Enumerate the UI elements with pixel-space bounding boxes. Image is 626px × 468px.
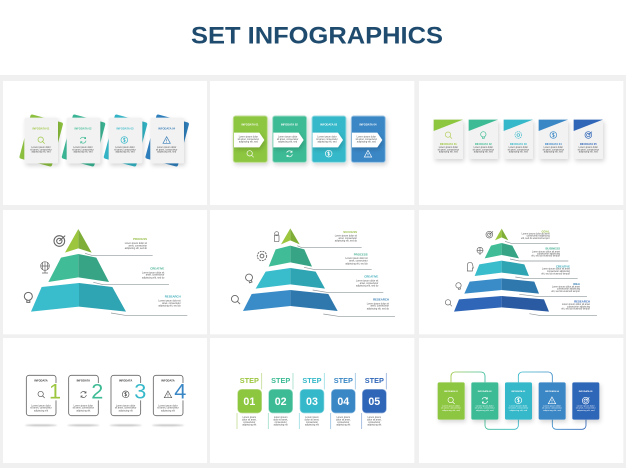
step 4: adipiscing elit <box>336 423 351 426</box>
card 5 <box>572 382 599 420</box>
card 1: adipiscing elit, sed <box>239 141 259 144</box>
label: creative: CREATIVE <box>556 264 570 268</box>
label: success: Lorem ipsum dolor sit <box>335 234 357 237</box>
leader lines <box>85 253 187 315</box>
label: idea: elit, sed do eiusmod tempor <box>551 290 580 293</box>
card 1: adipiscing elit, sed <box>31 151 51 154</box>
card 3: INFODATA 03 <box>511 390 526 393</box>
card 3: sit amet, consectetur <box>115 407 137 410</box>
label: goal: Lorem ipsum dolor sit amet <box>522 233 550 236</box>
label: business: BUSINESS <box>546 247 560 251</box>
pyramid <box>31 229 126 312</box>
step 4: consectetur <box>337 421 350 424</box>
card 1: sit amet, consectetur <box>30 407 52 410</box>
step 5 <box>362 373 386 429</box>
card 2: adipiscing elit, sed <box>476 409 494 412</box>
card 1: Lorem ipsum dolor <box>31 404 51 407</box>
step 4: 04 <box>337 396 349 408</box>
card 1: Lorem ipsum dolor <box>239 135 258 138</box>
label: business: consectetur adipiscing <box>537 253 561 256</box>
card 2: INFODATA 02 <box>281 122 298 126</box>
step 5: dolor sit amet, <box>367 418 382 421</box>
card 3: adipiscing elit <box>119 409 133 412</box>
label: process: amet, consectetur <box>128 244 147 247</box>
card 3: adipiscing elit, sed <box>317 141 337 144</box>
card 2 <box>469 120 498 159</box>
card 2 <box>61 114 106 167</box>
card 2: 2 <box>91 378 103 403</box>
card 4: sit amet, consectetur <box>157 407 179 410</box>
card 4 <box>539 382 566 420</box>
label: goal <box>521 229 550 240</box>
card 2: INFODATA 02 <box>75 126 92 130</box>
card 3: INFODATA 03 <box>320 122 338 126</box>
card 4: adipiscing elit, sed <box>543 409 562 412</box>
card 1 <box>233 116 267 162</box>
icon: bulb <box>24 292 32 302</box>
panel: connected cards <box>419 338 623 463</box>
card 4: 4 <box>174 378 186 403</box>
card 1 <box>438 382 465 420</box>
card 1: sit amet, consectetur <box>438 148 459 151</box>
card 3: sit amet, consectetur <box>508 407 529 410</box>
card 4: Lorem ipsum dolor <box>158 404 178 407</box>
card 4: Lorem ipsum dolor <box>544 146 563 149</box>
step 5: STEP <box>365 376 384 385</box>
step 3: 03 <box>306 396 318 408</box>
label: research: consectetur adipiscing <box>567 305 591 308</box>
card 1: adipiscing elit, sed <box>442 409 461 412</box>
step 5: consectetur <box>368 421 381 424</box>
card 4: sit amet, consectetur <box>542 407 562 410</box>
card 3: Lorem ipsum dolor <box>509 405 528 408</box>
card 5: Lorem ipsum dolor <box>579 146 598 149</box>
icon: globe <box>477 247 483 255</box>
card 2: sit amet, consectetur <box>277 138 299 141</box>
label: research: Lorem ipsum dolor sit <box>158 300 181 303</box>
card 2: Lorem ipsum dolor <box>73 146 93 149</box>
card 3: Lorem ipsum dolor <box>115 146 135 149</box>
card 1 <box>25 375 61 426</box>
card 4: adipiscing elit, sed <box>157 151 177 154</box>
card 4: INFODATA 04 <box>545 390 560 393</box>
card 2: adipiscing elit <box>76 409 91 412</box>
label: research: Lorem ipsum dolor sit amet <box>562 303 590 306</box>
step 2: adipiscing elit <box>274 423 288 426</box>
card 3: Lorem ipsum dolor <box>317 135 337 138</box>
label: research: Lorem ipsum dolor sit <box>367 302 389 305</box>
card 3: 3 <box>134 378 146 403</box>
label: business: Lorem ipsum dolor sit amet <box>532 250 560 253</box>
card 4 <box>152 375 186 426</box>
card 3 <box>505 382 532 420</box>
label: process: adipiscing elit, sed do <box>125 247 148 250</box>
card 1: INFODATA 01 <box>444 390 459 393</box>
label: process: PROCESS <box>354 252 368 256</box>
card 2: Lorem ipsum dolor <box>474 146 493 149</box>
step 4 <box>331 373 355 429</box>
label: process <box>345 252 368 265</box>
card 2: adipiscing elit, sed <box>474 151 494 154</box>
step 4: Lorem ipsum <box>337 416 350 419</box>
icon: head <box>467 262 473 271</box>
card 5: INFODATA 05 <box>580 142 597 146</box>
label: process: Lorem ipsum dolor sit <box>345 257 368 260</box>
card 5: sit amet, consectetur <box>578 148 599 151</box>
label: process: amet, consectetur <box>349 260 368 263</box>
card 2: INFODATA <box>77 378 90 382</box>
card 2 <box>67 375 103 426</box>
label: process <box>125 237 148 250</box>
label: creative <box>142 266 165 279</box>
card 4 <box>539 120 568 159</box>
card 4: INFODATA 04 <box>158 126 176 130</box>
card 3: sit amet, consectetur <box>114 148 136 151</box>
label: business: elit, sed do eiusmod tempor <box>531 255 560 258</box>
card 1: INFODATA 01 <box>242 122 259 126</box>
panel: outlined number cards <box>3 338 207 463</box>
label: idea: consectetur adipiscing <box>557 288 581 291</box>
card 3: sit amet, consectetur <box>508 148 529 151</box>
step 3: STEP <box>302 376 322 385</box>
label: success <box>335 230 358 243</box>
card 2: INFODATA 02 <box>478 390 492 393</box>
label: research <box>367 297 390 310</box>
step 1: dolor sit amet, <box>242 418 257 421</box>
leader lines <box>297 246 395 316</box>
icon: target <box>486 231 493 238</box>
card 4: INFODATA <box>161 378 175 382</box>
label: idea: IDEA <box>573 282 580 286</box>
card 1: sit amet, consectetur <box>441 407 461 410</box>
label: creative <box>356 275 379 288</box>
label: research: RESEARCH <box>373 297 389 301</box>
label: success: amet, consectetur <box>338 237 357 240</box>
card 2: sit amet, consectetur <box>73 407 94 410</box>
card 1: Lorem ipsum dolor <box>439 146 458 149</box>
panel: three level pyramid <box>3 210 207 334</box>
icon: target <box>54 236 65 246</box>
card 5: INFODATA 05 <box>579 390 593 393</box>
card 2: INFODATA 02 <box>475 142 492 146</box>
label: process: Lorem ipsum dolor sit <box>125 242 147 245</box>
card 4: Lorem ipsum dolor <box>157 146 177 149</box>
card 3 <box>110 375 146 426</box>
card 3: adipiscing elit, sed <box>510 409 528 412</box>
label: creative: adipiscing elit, sed do <box>142 276 165 279</box>
label: creative: elit, sed do eiusmod tempor <box>541 272 570 275</box>
panel: four level pyramid <box>210 210 414 334</box>
card 5: adipiscing elit, sed <box>577 409 595 412</box>
step 3 <box>299 373 324 429</box>
step 1: STEP <box>240 376 259 385</box>
label: research: RESEARCH <box>574 299 590 303</box>
card 1: INFODATA 01 <box>440 142 457 146</box>
step 1: consectetur <box>243 421 256 424</box>
card 1: sit amet, consectetur <box>238 138 259 141</box>
label: creative: Lorem ipsum dolor sit <box>142 271 165 274</box>
label: business <box>531 247 561 258</box>
icon: bulb <box>245 273 254 284</box>
step 2: Lorem ipsum <box>274 416 287 419</box>
card 5: sit amet, consectetur <box>576 407 596 410</box>
label: research: amet, consectetur <box>162 302 181 305</box>
label: creative: amet, consectetur <box>146 274 165 277</box>
label: creative: amet, consectetur <box>360 282 379 285</box>
label: success: adipiscing elit, sed do <box>335 240 358 243</box>
leader lines <box>505 241 597 316</box>
card 1 <box>19 114 63 167</box>
card 2: sit amet, consectetur <box>475 407 495 410</box>
step 3: adipiscing elit <box>305 423 319 426</box>
panel: rotated cards <box>3 81 207 205</box>
panel: arrow band cards <box>210 81 414 205</box>
label: creative: Lorem ipsum dolor sit <box>356 280 379 283</box>
card 1 <box>434 120 463 159</box>
card 4: Lorem ipsum dolor <box>357 135 376 138</box>
step 4: STEP <box>334 376 353 385</box>
step 1: 01 <box>243 396 255 408</box>
card 2: sit amet, consectetur <box>473 148 494 151</box>
card 5: Lorem ipsum dolor <box>577 405 595 408</box>
icon: gear <box>257 251 267 261</box>
card 1: adipiscing elit, sed <box>439 151 459 154</box>
card 2: adipiscing elit, sed <box>73 151 93 154</box>
card 4: adipiscing elit, sed <box>357 141 377 144</box>
card 5 <box>574 120 603 159</box>
card 3: INFODATA 03 <box>510 142 527 146</box>
card 1: INFODATA <box>34 378 48 382</box>
step 2 <box>268 373 293 429</box>
card 4: sit amet, consectetur <box>356 138 377 141</box>
card 3: adipiscing elit, sed <box>115 151 135 154</box>
card 2: Lorem ipsum dolor <box>74 404 93 407</box>
card 3 <box>312 116 346 162</box>
card 2 <box>471 382 498 420</box>
card 3: adipiscing elit, sed <box>509 151 529 154</box>
label: success: SUCCESS <box>343 230 357 234</box>
panel: corner triangle cards <box>419 81 623 205</box>
step 1 <box>237 373 262 429</box>
card 3: INFODATA <box>119 378 132 382</box>
card 2: Lorem ipsum dolor <box>278 135 298 138</box>
label: research: adipiscing elit, sed do <box>367 307 390 310</box>
card 4: adipiscing elit <box>161 409 175 412</box>
card 3 <box>103 114 148 167</box>
label: creative: CREATIVE <box>150 266 164 270</box>
card 4: INFODATA 04 <box>545 142 562 146</box>
step 3: consectetur <box>306 421 318 424</box>
step 2: STEP <box>271 376 290 385</box>
step 3: dolor sit amet, <box>305 418 320 421</box>
label: research: elit, sed do eiusmod tempor <box>561 308 590 311</box>
card 1: 1 <box>49 378 61 403</box>
icon: magnifier <box>231 295 240 304</box>
card 4: Lorem ipsum dolor <box>543 405 561 408</box>
step 1: adipiscing elit <box>242 423 257 426</box>
panel: five level pyramid <box>419 210 623 334</box>
label: creative: CREATIVE <box>364 275 378 279</box>
label: process: adipiscing elit, sed do <box>345 262 368 265</box>
card 4 <box>351 116 385 162</box>
panel: numbered steps <box>210 338 414 463</box>
step 1: Lorem ipsum <box>243 416 256 419</box>
label: goal: elit, sed do eiusmod tempor <box>521 237 550 240</box>
card 4: INFODATA 04 <box>360 122 377 126</box>
card 1: adipiscing elit <box>34 409 48 412</box>
connectors <box>451 372 586 429</box>
step 3: Lorem ipsum <box>305 416 319 419</box>
title: SET INFOGRAPHICS <box>191 22 443 49</box>
step 2: 02 <box>275 396 287 408</box>
icon: globe <box>41 262 49 273</box>
card 4 <box>145 114 189 167</box>
card 4: adipiscing elit, sed <box>544 151 564 154</box>
card 4: sit amet, consectetur <box>156 148 178 151</box>
step 4: dolor sit amet, <box>336 418 351 421</box>
card 1: Lorem ipsum dolor <box>442 405 460 408</box>
step 2: consectetur <box>275 421 287 424</box>
card 3: Lorem ipsum dolor <box>509 146 528 149</box>
card 3: INFODATA 03 <box>117 126 134 130</box>
step 2: dolor sit amet, <box>273 418 288 421</box>
card 1: INFODATA 01 <box>33 126 50 130</box>
icon: medal <box>274 232 279 242</box>
label: goal: consectetur adipiscing <box>527 235 550 238</box>
label: research <box>158 295 181 308</box>
step 5: Lorem ipsum <box>368 416 381 419</box>
card 2: sit amet, consectetur <box>72 148 94 151</box>
pyramid <box>454 229 549 312</box>
step 5: 05 <box>368 396 380 408</box>
card 5: adipiscing elit, sed <box>579 151 599 154</box>
label: research: RESEARCH <box>165 295 181 299</box>
card 3 <box>504 120 533 159</box>
pyramid <box>243 228 338 311</box>
label: research <box>561 299 591 311</box>
step 5: adipiscing elit <box>367 423 382 426</box>
card 3: Lorem ipsum dolor <box>116 404 136 407</box>
card 4: sit amet, consectetur <box>543 148 564 151</box>
icon: bulb <box>455 282 462 290</box>
label: goal: GOAL <box>541 229 550 233</box>
card 3: sit amet, consectetur <box>316 138 338 141</box>
card 2: Lorem ipsum dolor <box>476 405 494 408</box>
card 1: Lorem ipsum dolor <box>31 146 51 149</box>
card 2: adipiscing elit, sed <box>278 141 298 144</box>
label: creative: Lorem ipsum dolor sit amet <box>542 268 570 271</box>
label: research: adipiscing elit, sed do <box>158 305 181 308</box>
icon: magnifier <box>445 300 452 306</box>
label: idea: Lorem ipsum dolor sit amet <box>552 285 580 288</box>
label: creative: adipiscing elit, sed do <box>356 285 379 288</box>
label: creative <box>541 264 571 275</box>
label: creative: consectetur adipiscing <box>547 270 571 273</box>
card 1: sit amet, consectetur <box>30 148 52 151</box>
label: research: amet, consectetur <box>370 305 389 308</box>
card 2 <box>273 116 307 162</box>
label: process: PROCESS <box>133 237 147 241</box>
label: idea <box>551 282 581 293</box>
